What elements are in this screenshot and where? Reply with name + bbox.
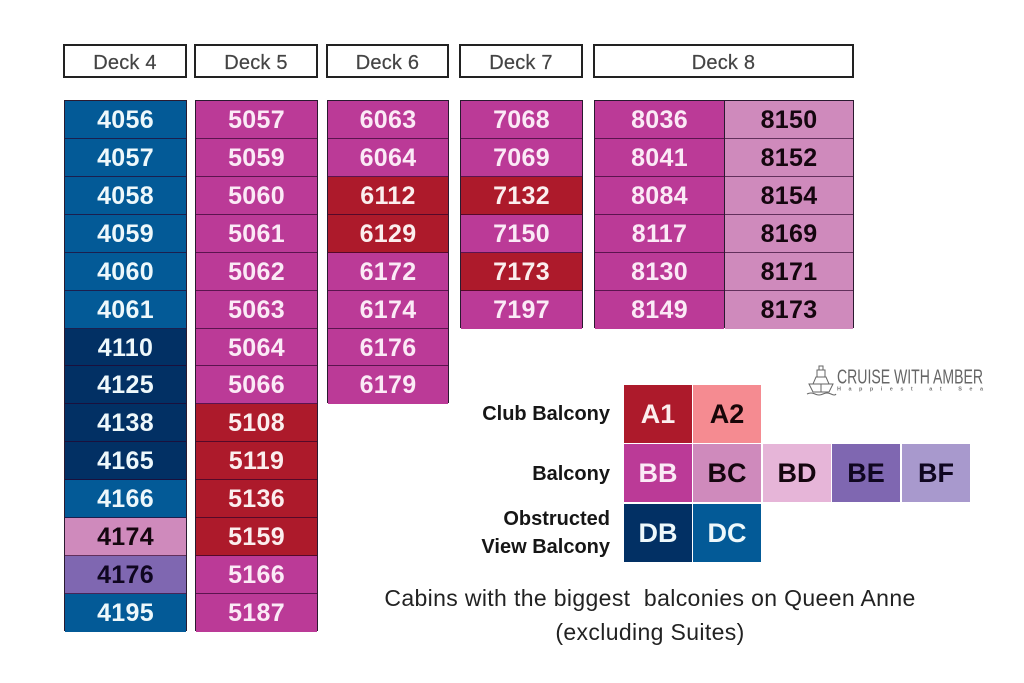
panel: Deck 4 cabin column: 4174 <box>97 523 154 551</box>
legend key: BE <box>832 444 900 502</box>
panel: Deck 8 first cabin column: 8130 <box>631 258 688 286</box>
panel: Deck 5 cabin column: 5061 <box>228 220 285 248</box>
panel: Deck 8 second cabin column: 8173 <box>761 296 817 324</box>
caption: Cabins with the biggest balconies on Queen Anne <box>384 585 916 611</box>
panel: Deck 8 first cabin column: 8036 <box>631 106 688 134</box>
panel: Deck 8 first cabin column: 8149 <box>631 296 688 324</box>
legend key: DC: DC <box>708 518 746 548</box>
panel: Deck 8 first cabin column <box>594 100 725 328</box>
label: Balcony: Balcony <box>532 463 610 485</box>
panel: Deck 5 cabin column: 5057 <box>228 106 285 134</box>
panel: Deck 8 second cabin column: 8169 <box>761 220 817 248</box>
heading: Deck 6: Deck 6 <box>356 52 419 74</box>
panel: Deck 4 cabin column: 4110 <box>98 334 153 362</box>
panel: Deck 8 second cabin column: 8150 <box>761 106 817 134</box>
panel: Deck 6 cabin column: 6179 <box>360 371 416 399</box>
heading: Deck 4 <box>63 44 187 78</box>
panel: Deck 7 cabin column <box>460 100 583 328</box>
panel: Deck 5 cabin column: 5159 <box>228 523 285 551</box>
legend key: BF: BF <box>918 458 954 488</box>
legend key: BF <box>902 444 970 502</box>
label: Obstructed View Balcony: View Balcony <box>481 536 610 558</box>
panel: Deck 4 cabin column: 4138 <box>97 409 154 437</box>
panel: Deck 5 cabin column <box>195 100 318 631</box>
legend key: DB <box>624 504 692 562</box>
panel: Deck 6 cabin column: 6129 <box>360 220 416 248</box>
panel: Deck 6 cabin column: 6112 <box>360 182 416 210</box>
panel: Deck 5 cabin column: 5187 <box>228 599 285 627</box>
panel: Deck 5 cabin column: 5119 <box>229 447 284 475</box>
panel: Deck 7 cabin column: 7068 <box>493 106 550 134</box>
panel: Deck 6 cabin column: 6063 <box>360 106 416 134</box>
legend key: BB: BB <box>638 458 678 488</box>
panel: Deck 7 cabin column: 7173 <box>493 258 550 286</box>
panel: Deck 4 cabin column: 4056 <box>97 106 154 134</box>
panel: Deck 8 second cabin column <box>724 100 854 328</box>
panel: Deck 8 first cabin column: 8084 <box>631 182 688 210</box>
panel: Deck 8 first cabin column: 8117 <box>632 220 687 248</box>
panel: Deck 6 cabin column: 6064 <box>360 144 416 172</box>
panel: Deck 6 cabin column: 6174 <box>360 296 416 324</box>
panel: Deck 4 cabin column: 4059 <box>97 220 154 248</box>
panel: Deck 5 cabin column: 5166 <box>228 561 285 589</box>
caption <box>384 585 916 645</box>
panel: Deck 8 second cabin column: 8171 <box>761 258 817 286</box>
panel: Deck 6 cabin column: 6172 <box>360 258 416 286</box>
label: Obstructed View Balcony <box>481 508 610 558</box>
panel: Deck 4 cabin column: 4057 <box>97 144 154 172</box>
heading: Deck 8: Deck 8 <box>692 52 755 74</box>
panel: Deck 6 cabin column <box>327 100 449 403</box>
panel: Deck 7 cabin column: 7069 <box>493 144 550 172</box>
legend key: A1 <box>624 385 692 443</box>
panel: Deck 4 cabin column: 4060 <box>97 258 154 286</box>
logo: Cruise With Amber <box>806 366 984 396</box>
legend key: DC <box>693 504 761 562</box>
panel: Deck 6 cabin column: 6176 <box>360 334 416 362</box>
label: Club Balcony: Club Balcony <box>482 403 610 425</box>
panel: Deck 4 cabin column: 4176 <box>97 561 154 589</box>
panel: Deck 8 second cabin column: 8154 <box>761 182 817 210</box>
legend key: BB <box>624 444 692 502</box>
panel: Deck 4 cabin column: 4061 <box>97 296 154 324</box>
panel: Deck 4 cabin column: 4058 <box>97 182 154 210</box>
legend key: A2 <box>693 385 761 443</box>
panel: Deck 5 cabin column: 5063 <box>228 296 285 324</box>
legend key: BD <box>763 444 831 502</box>
heading: Deck 5 <box>194 44 318 78</box>
panel: Deck 4 cabin column: 4166 <box>97 485 154 513</box>
heading: Deck 6 <box>326 44 449 78</box>
panel: Deck 7 cabin column: 7197 <box>493 296 550 324</box>
panel: Deck 7 cabin column: 7150 <box>493 220 550 248</box>
heading: Deck 8 <box>593 44 854 78</box>
legend key: BC <box>693 444 761 502</box>
icon: ship <box>807 366 836 395</box>
heading: Deck 4: Deck 4 <box>93 52 157 74</box>
panel: Deck 5 cabin column: 5066 <box>228 371 285 399</box>
heading: Deck 7: Deck 7 <box>489 52 553 74</box>
panel: Deck 5 cabin column: 5062 <box>228 258 285 286</box>
panel: Deck 5 cabin column: 5064 <box>228 334 285 362</box>
heading: Deck 7 <box>459 44 583 78</box>
legend key: DB: DB <box>638 518 678 548</box>
panel: Deck 7 cabin column: 7132 <box>493 182 550 210</box>
legend key: BC: BC <box>708 458 746 488</box>
legend key: BD: BD <box>778 458 816 488</box>
caption: (excluding Suites) <box>555 619 745 645</box>
legend key: A2: A2 <box>710 399 744 429</box>
panel: Deck 5 cabin column: 5060 <box>228 182 285 210</box>
panel: Deck 5 cabin column: 5108 <box>228 409 285 437</box>
legend key: A1: A1 <box>641 399 675 429</box>
legend key: BE: BE <box>847 458 885 488</box>
panel: Deck 4 cabin column: 4195 <box>97 599 154 627</box>
panel: Deck 5 cabin column: 5136 <box>228 485 285 513</box>
label: Obstructed View Balcony: Obstructed <box>503 508 610 530</box>
panel: Deck 4 cabin column: 4165 <box>97 447 154 475</box>
panel: Deck 4 cabin column: 4125 <box>97 371 154 399</box>
panel: Deck 8 first cabin column: 8041 <box>631 144 688 172</box>
panel: Deck 8 second cabin column: 8152 <box>761 144 817 172</box>
logo tagline: Happiest at Sea <box>837 386 984 392</box>
heading: Deck 5: Deck 5 <box>224 52 288 74</box>
panel: Deck 4 cabin column <box>64 100 187 631</box>
panel: Deck 5 cabin column: 5059 <box>228 144 285 172</box>
